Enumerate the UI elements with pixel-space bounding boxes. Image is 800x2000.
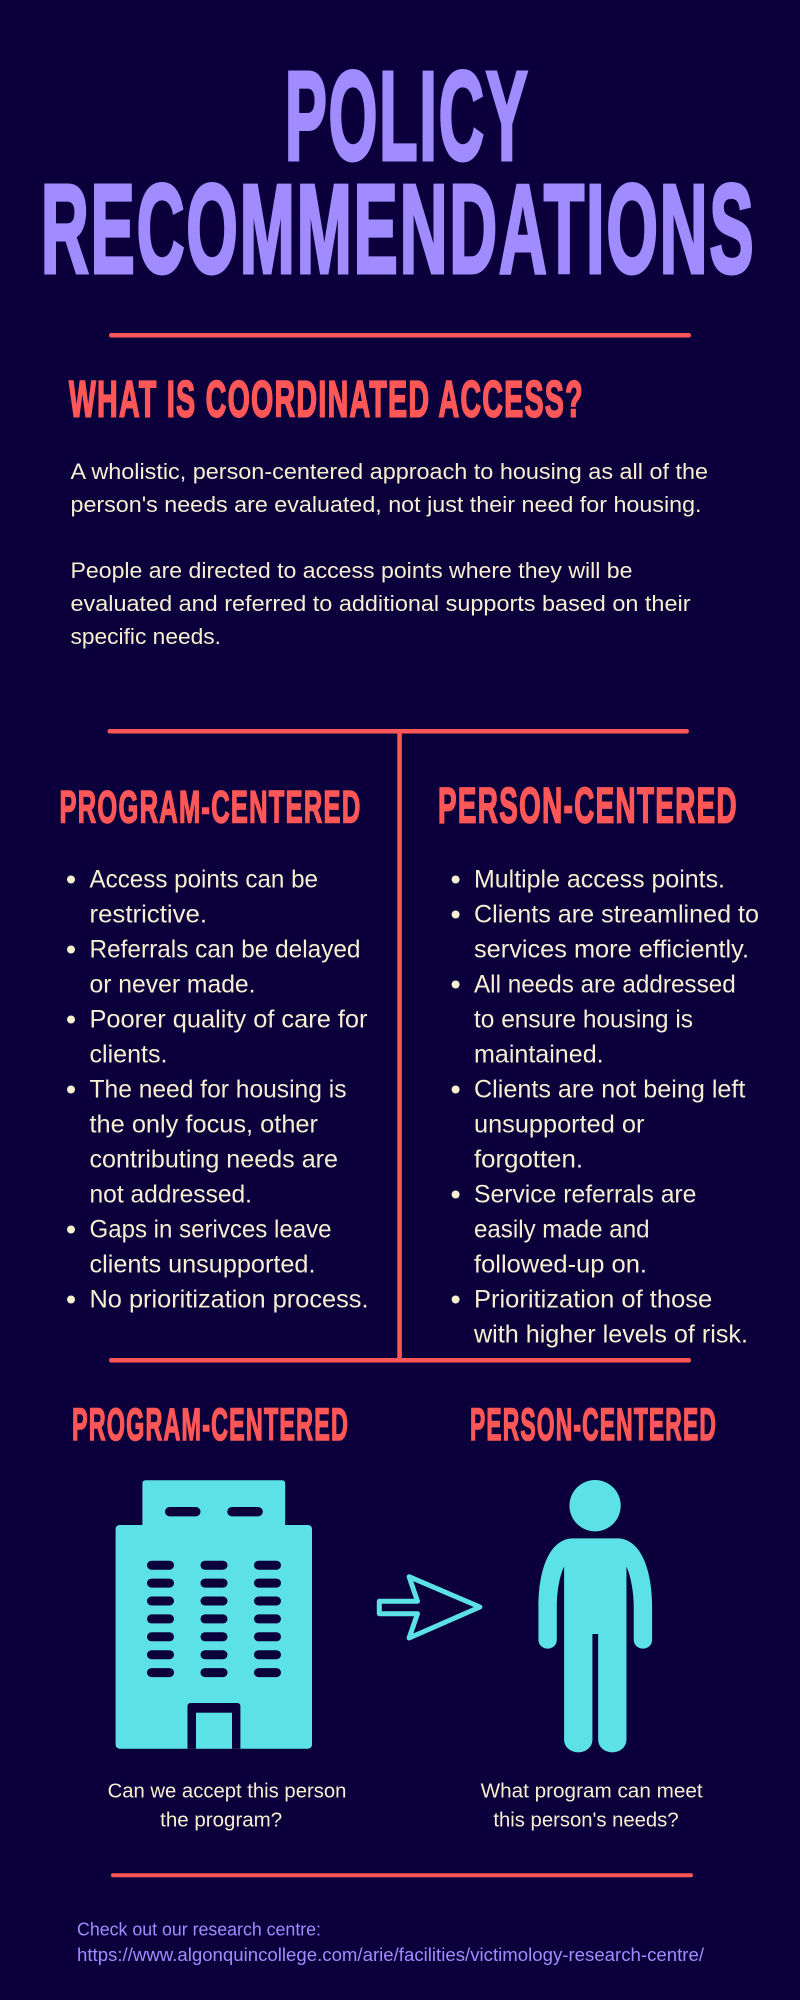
bullet list: person-centered: Service referrals are	[474, 1180, 696, 1208]
bullet list: person-centered: easily made and	[474, 1216, 650, 1244]
title	[41, 44, 756, 300]
icon: building	[116, 1480, 312, 1749]
arrow: program to person	[379, 1577, 480, 1638]
text block: definition: A wholistic, person-centered approach to housing as all of the	[70, 459, 708, 484]
bullet list: person-centered: Prioritization of those	[474, 1286, 712, 1314]
bullet list: program-centered	[67, 866, 368, 1314]
heading: program-centered (comparison): PROGRAM-CENTERED	[72, 1399, 349, 1450]
caption: program-centered question: the program?	[160, 1810, 282, 1832]
bullet list: program-centered: Referrals can be delayed	[90, 936, 360, 964]
bullet list: person-centered: All needs are addressed	[474, 970, 736, 998]
bullet list: program-centered: Gaps in serivces leave	[90, 1216, 332, 1244]
bullet list: program-centered: not addressed.	[90, 1180, 252, 1208]
bullet list: person-centered	[452, 866, 759, 1348]
bullet list: person-centered: with higher levels of risk.	[473, 1320, 748, 1348]
text block: definition	[70, 459, 708, 649]
bullet list: person-centered: services more efficiently.	[474, 936, 749, 964]
bullet list: person-centered: Multiple access points.	[474, 866, 725, 894]
bullet list: person-centered: followed-up on.	[474, 1250, 647, 1278]
bullet list: program-centered: contributing needs are	[90, 1146, 338, 1174]
bullet list: program-centered: the only focus, other	[90, 1110, 318, 1138]
bullet list: person-centered: unsupported or	[474, 1110, 644, 1138]
bullet list: person-centered: to ensure housing is	[474, 1006, 693, 1034]
caption: person-centered question: this person's needs?	[493, 1810, 679, 1832]
icon: person	[538, 1480, 652, 1752]
footer: research centre link: https://www.algonquincollege.com/arie/facilities/victimology-research-centre/	[77, 1945, 704, 1965]
bullet list: person-centered: forgotten.	[474, 1146, 583, 1174]
text block: definition: evaluated and referred to additional supports based on their	[70, 591, 691, 616]
text block: definition: specific needs.	[70, 624, 221, 649]
bullet list: person-centered: Clients are streamlined to	[474, 900, 759, 928]
bullet list: program-centered: Access points can be	[90, 866, 318, 894]
caption: person-centered question	[481, 1781, 703, 1832]
caption: program-centered question: Can we accept this person	[108, 1781, 346, 1803]
panel: program-centered list	[60, 781, 368, 1314]
bullet list: program-centered: No prioritization process.	[90, 1286, 368, 1314]
bullet list: program-centered: Poorer quality of care for	[90, 1006, 368, 1034]
bullet list: program-centered: or never made.	[90, 970, 256, 998]
title: POLICY	[285, 44, 530, 186]
bullet list: person-centered: Clients are not being left	[474, 1076, 745, 1104]
caption: person-centered question: What program can meet	[481, 1781, 703, 1803]
panel: person-centered list	[438, 777, 759, 1348]
heading: program-centered: PROGRAM-CENTERED	[60, 781, 362, 832]
bullet list: person-centered: maintained.	[474, 1040, 604, 1068]
bullet list: program-centered: clients unsupported.	[90, 1250, 316, 1278]
bullet list: program-centered: restrictive.	[90, 900, 207, 928]
footer: research centre link	[77, 1920, 704, 1965]
text block: definition: People are directed to access points where they will be	[70, 558, 632, 583]
footer: research centre link: Check out our research centre:	[77, 1920, 321, 1940]
bullet list: program-centered: The need for housing is	[90, 1076, 346, 1104]
bullet list: program-centered: clients.	[90, 1040, 168, 1068]
text block: definition: person's needs are evaluated, not just their need for housing.	[70, 492, 702, 517]
caption: program-centered question	[108, 1781, 346, 1832]
